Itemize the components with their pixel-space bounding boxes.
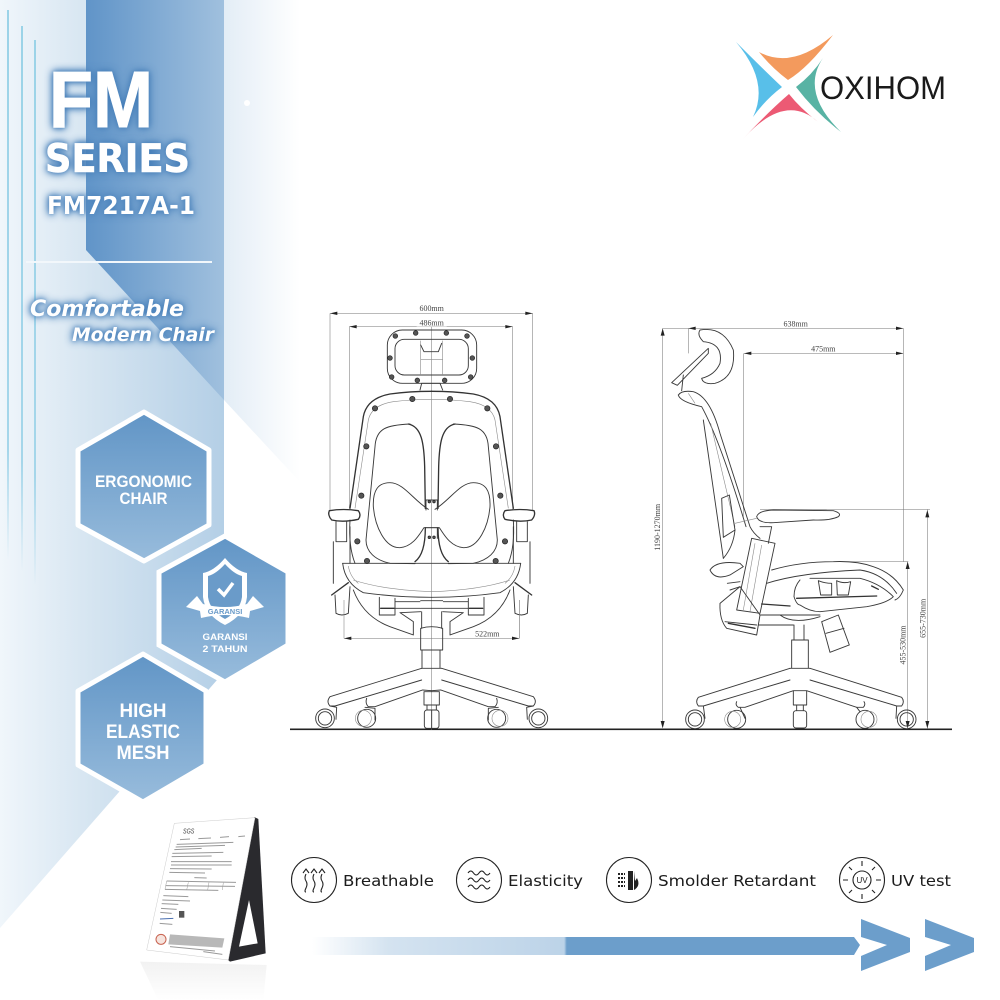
tagline: Comfortable [30,297,184,322]
hexagon: warranty: 2 TAHUN [202,644,248,655]
front view dimensions: 600mm [419,304,445,313]
chair body [316,391,548,728]
vertical accent lines [7,10,36,585]
feature: breathable [292,858,434,902]
icon: uv sun: UV [856,876,868,885]
hexagon: ergonomic chair: ERGONOMIC [95,473,192,491]
icon: orange petal [759,35,833,80]
certificate stand [227,817,266,962]
feature: smolder retardant [606,858,816,902]
certificate reflection [140,962,267,1000]
side view dimensions [653,319,930,728]
side view dimensions: 455-530mm [898,625,907,665]
title: FM: FM [49,55,153,144]
feature: uv test: UV test [891,872,951,890]
side view dimensions: 655-730mm [918,598,927,638]
hexagon: high elastic mesh: ELASTIC [106,722,180,743]
tagline: Modern Chair [72,324,216,346]
icon: pink petal [743,94,818,139]
hexagon: high elastic mesh: HIGH [120,701,166,722]
arrow chevron 2 [925,919,974,971]
tagline [30,297,216,346]
feature: smolder retardant: Smolder Retardant [658,872,816,890]
feature: uv test [840,858,951,902]
model number: FM7217A-1 [47,191,195,220]
chair drawing: side view [653,319,930,729]
hexagon: warranty [159,530,294,685]
front view dimensions: 522mm [475,630,500,639]
headrest [387,330,477,390]
title: SERIES: SERIES [45,137,190,182]
chair side body [672,329,916,729]
hexagon: high elastic mesh [78,654,206,802]
feature: breathable: Breathable [343,872,434,890]
certificate paper: SGS [183,826,195,835]
certificate paper [147,818,255,960]
feature: elasticity: Elasticity [508,872,583,890]
hexagon: ergonomic chair: CHAIR [120,490,168,508]
icon: warranty shield [186,558,264,625]
divider line [26,261,212,263]
hexagon: ergonomic chair [78,412,209,561]
front view dimensions [330,303,533,730]
icon: warranty shield: GARANSI [208,607,242,616]
arrow bar [312,919,974,971]
certificate on stand [140,817,267,1000]
arrow chevron 1 [861,919,910,971]
icon: waves [468,871,490,889]
feature: elasticity [456,858,583,902]
chair drawing: front view [316,303,548,730]
front view dimensions: 486mm [419,318,445,327]
hexagon: high elastic mesh: MESH [116,743,170,764]
background: light side panel [0,0,300,928]
logo: OXIHOM: OXIHOM [820,70,946,106]
side view dimensions: 638mm [783,319,809,328]
small sparkle [244,100,250,106]
icon: flame on wall [618,871,638,890]
ground line [290,728,952,730]
hexagon: warranty: GARANSI [202,632,248,643]
icon: teal petal [796,58,841,132]
icon: breathable arrows [303,869,325,892]
logo: OXIHOM [736,35,946,139]
side view dimensions: 1190-1270mm [653,503,662,551]
icon: blue petal [736,42,782,117]
side view dimensions: 475mm [811,345,836,354]
